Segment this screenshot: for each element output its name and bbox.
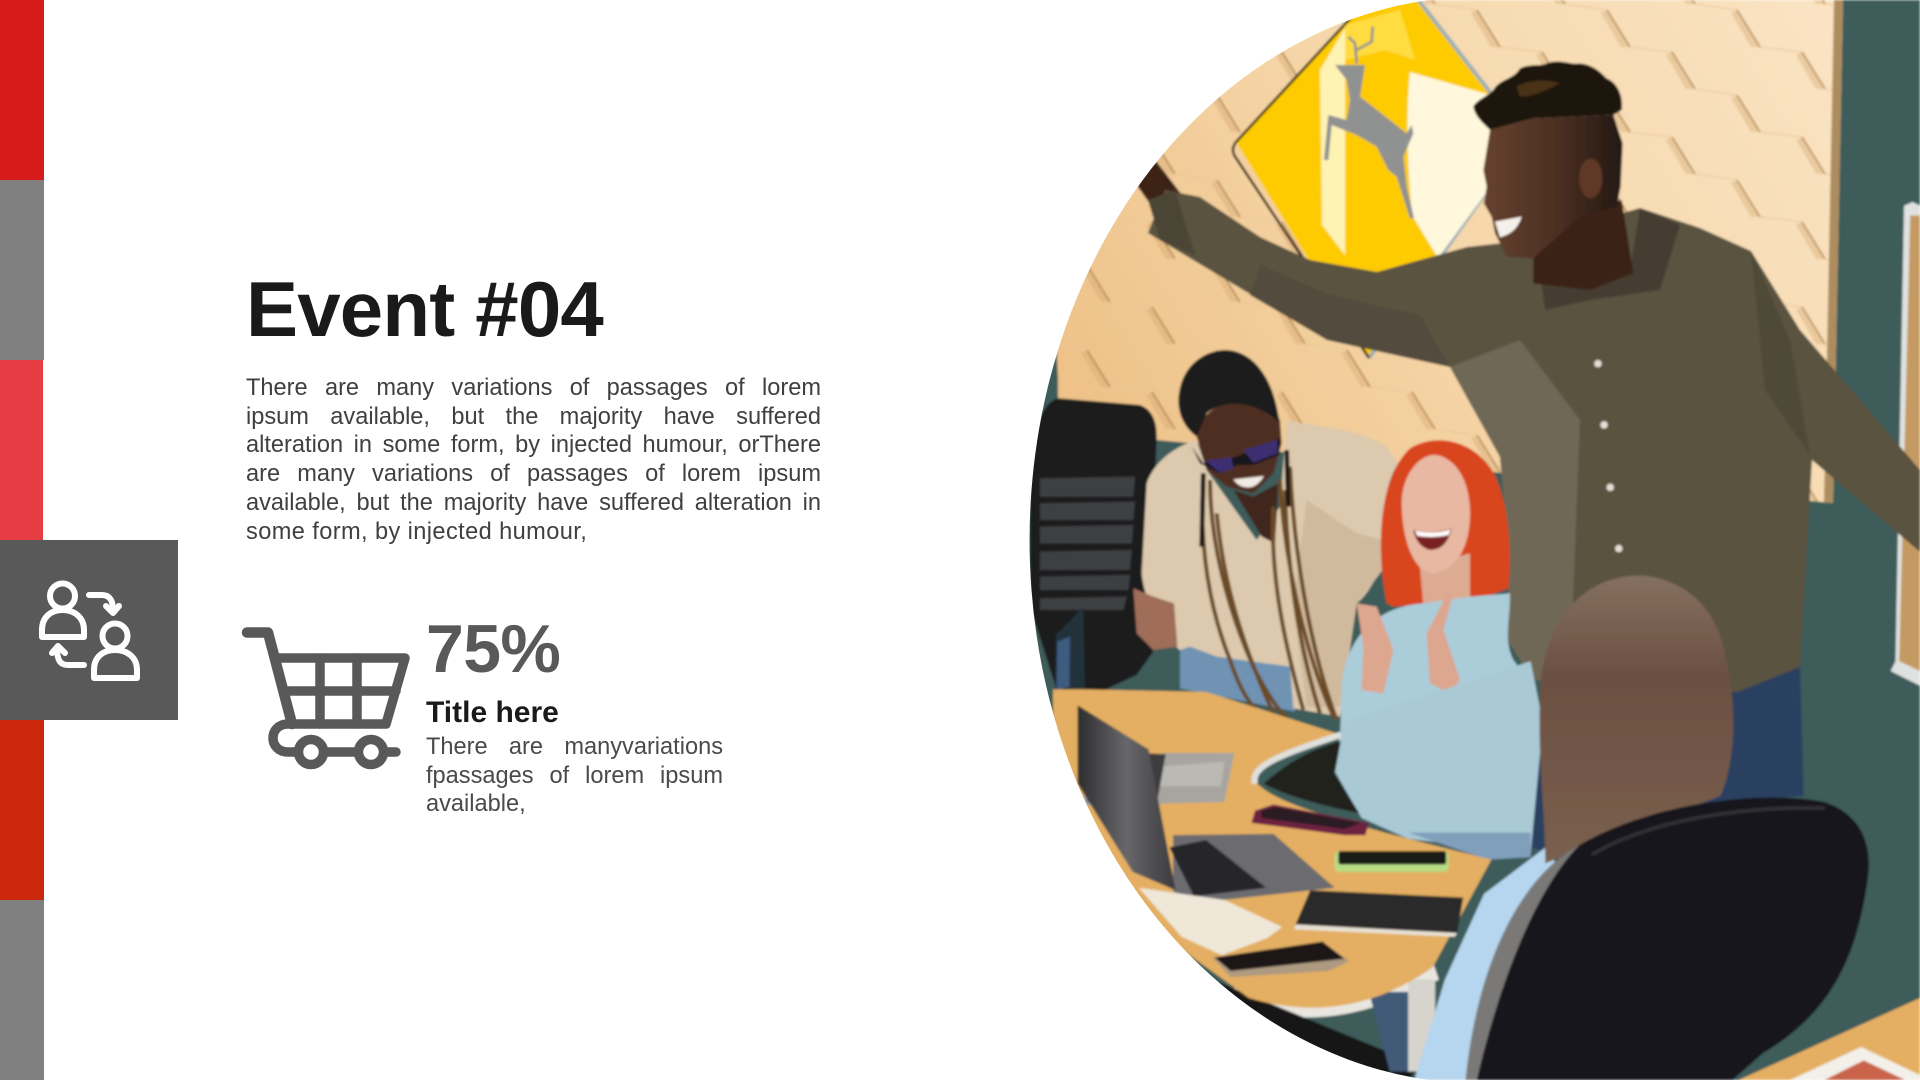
body paragraph: some form, by injected humour, xyxy=(246,519,587,545)
subheading: Title here: Title here xyxy=(426,696,559,729)
body paragraph: There are many variations of passages of lorem xyxy=(246,375,821,401)
laptops, phones and notebooks xyxy=(1084,753,1234,806)
red-haired woman xyxy=(1338,439,1518,730)
stat description: fpassages of lorem ipsum xyxy=(426,763,723,789)
body paragraph: available, but the majority have suffered alteration in xyxy=(246,490,821,516)
stat description: There are manyvariations xyxy=(426,734,723,760)
body paragraph: are many variations of passages of lorem ipsum xyxy=(246,461,821,487)
left stripe: light red xyxy=(0,360,43,540)
left stripe: lower gray xyxy=(0,900,44,1080)
deer on the sign xyxy=(1324,27,1414,218)
man's head xyxy=(1473,61,1633,290)
man's jeans xyxy=(1522,661,1804,851)
desk xyxy=(1224,961,1439,1017)
bottom-right desk and papers xyxy=(1739,998,1920,1080)
active tab box with people-exchange icon xyxy=(0,540,178,720)
stat: 75%: 75% xyxy=(426,611,560,687)
wood hex panel and sign, drawn in full-size coordinates xyxy=(1040,0,1843,503)
body paragraph: alteration in some form, by injected humour, orThere xyxy=(246,432,821,458)
left stripe: red xyxy=(0,0,44,180)
body paragraph xyxy=(246,375,821,545)
icon: shopping cart xyxy=(242,627,410,770)
body paragraph: ipsum available, but the majority have suffered xyxy=(246,404,821,430)
left chair and woman in beige shirt xyxy=(1030,350,1398,720)
foreground woman and chair xyxy=(1414,845,1555,1080)
left stripe: gray xyxy=(0,180,44,360)
stat description: available, xyxy=(426,791,526,817)
icon: people exchange xyxy=(39,580,140,681)
photo: team celebrating in an office, clipped to ellipse xyxy=(1030,0,1920,1080)
title: Event #04 xyxy=(246,265,603,353)
left stripe: dark red xyxy=(0,720,44,900)
man in olive shirt xyxy=(1133,153,1920,692)
stat description xyxy=(426,734,723,817)
